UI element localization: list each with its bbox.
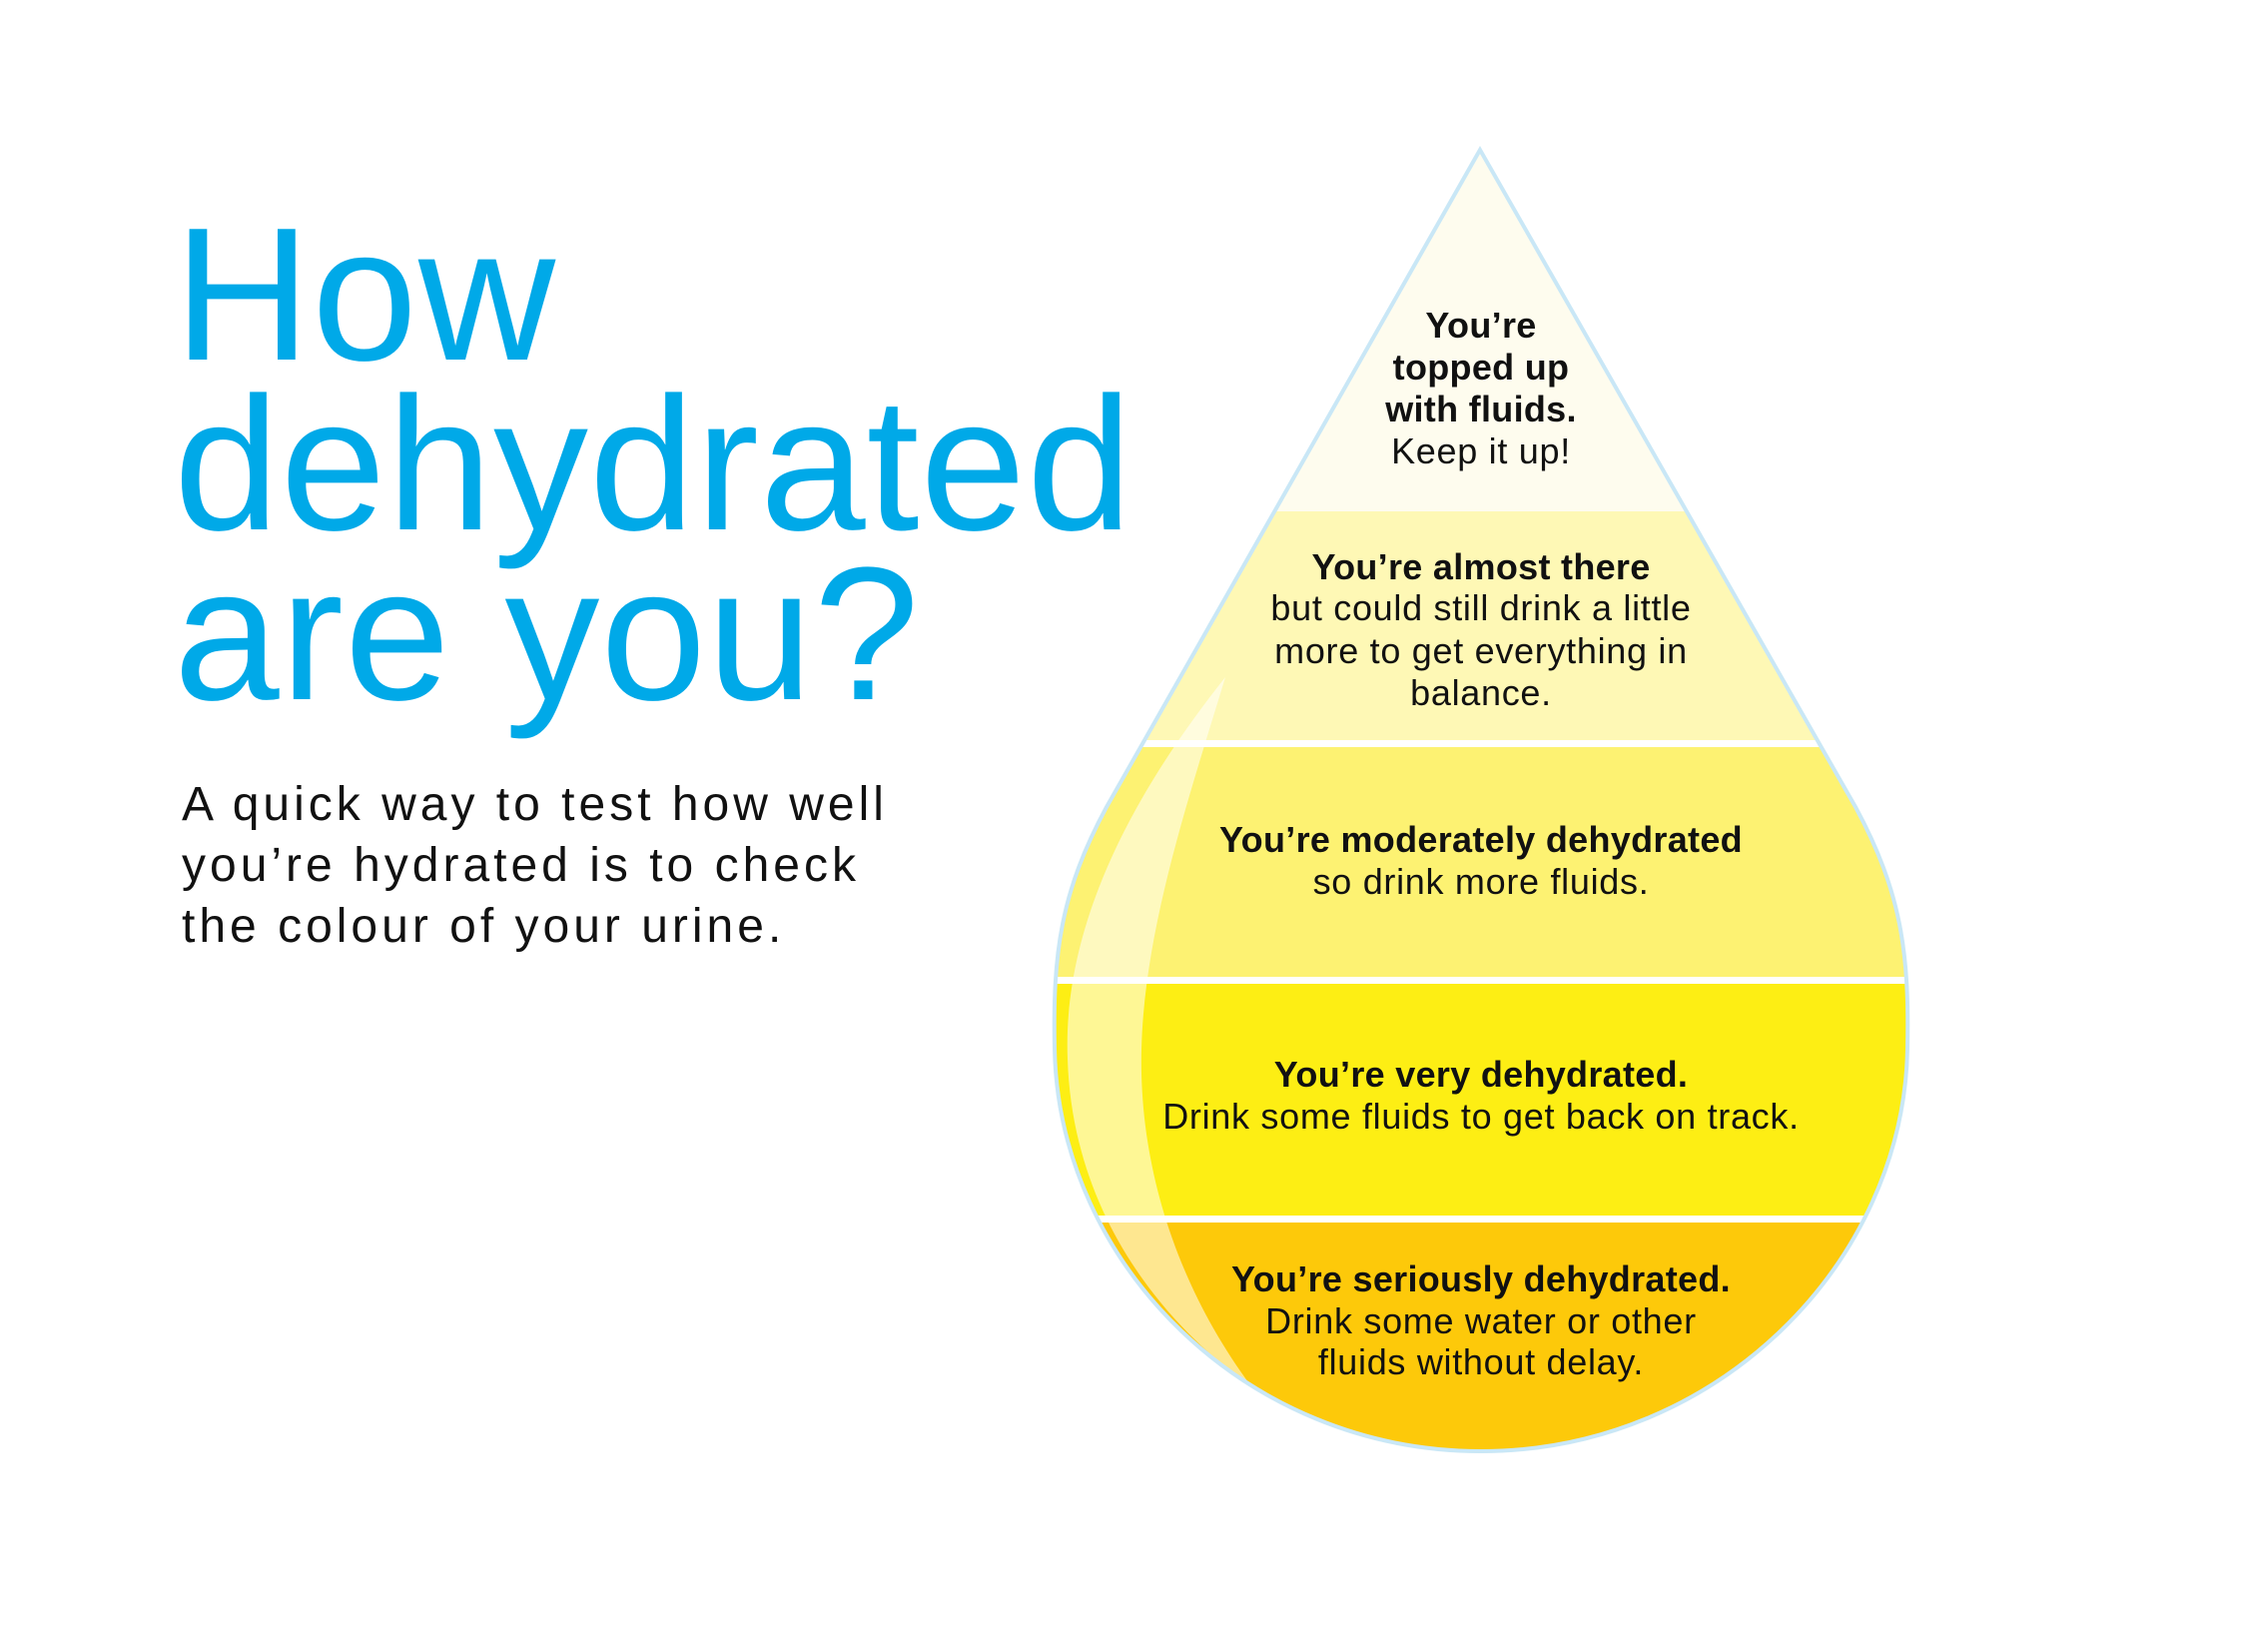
subtitle text: you’re hydrated is to check xyxy=(182,839,860,892)
drop outline xyxy=(1055,150,1907,1451)
band 3 xyxy=(1058,747,1904,977)
drop chart xyxy=(1053,146,1909,1453)
text: seriously: Drink some water or other xyxy=(1265,1300,1697,1341)
text: topped up: topped up xyxy=(1393,347,1569,388)
text: almost there: You’re almost there xyxy=(1311,546,1651,587)
text: topped up: with fluids. xyxy=(1384,389,1577,429)
text: very: Drink some fluids to get back on track. xyxy=(1162,1096,1800,1137)
text: almost there: more to get everything in xyxy=(1274,630,1688,671)
text: moderately xyxy=(1219,819,1743,902)
text: seriously: You’re seriously dehydrated. xyxy=(1231,1258,1731,1299)
text: topped up xyxy=(1384,305,1577,471)
highlight xyxy=(1068,677,1251,1386)
text: topped up: You’re xyxy=(1425,305,1537,346)
band 5 xyxy=(1103,1223,1860,1449)
title: How xyxy=(174,189,556,401)
band 4 xyxy=(1057,984,1905,1216)
subtitle text: A quick way to test how well xyxy=(182,778,888,831)
subtitle text xyxy=(182,778,888,953)
text: almost there: but could still drink a little xyxy=(1270,587,1692,628)
title xyxy=(174,189,1133,740)
text: almost there xyxy=(1270,546,1692,713)
text: very: You’re very dehydrated. xyxy=(1274,1054,1688,1095)
text: topped up: Keep it up! xyxy=(1391,430,1571,471)
title: dehydrated xyxy=(174,359,1133,570)
subtitle text: the colour of your urine. xyxy=(182,900,785,953)
text: almost there: balance. xyxy=(1410,672,1552,713)
text: very xyxy=(1162,1054,1800,1137)
band 2 xyxy=(1146,511,1816,740)
title: are you? xyxy=(174,528,920,740)
text: seriously xyxy=(1231,1258,1731,1382)
text: moderately: so drink more fluids. xyxy=(1313,861,1649,902)
band 1 xyxy=(1276,154,1684,511)
text: moderately: You’re moderately dehydrated xyxy=(1219,819,1743,860)
text: seriously: fluids without delay. xyxy=(1318,1341,1644,1382)
